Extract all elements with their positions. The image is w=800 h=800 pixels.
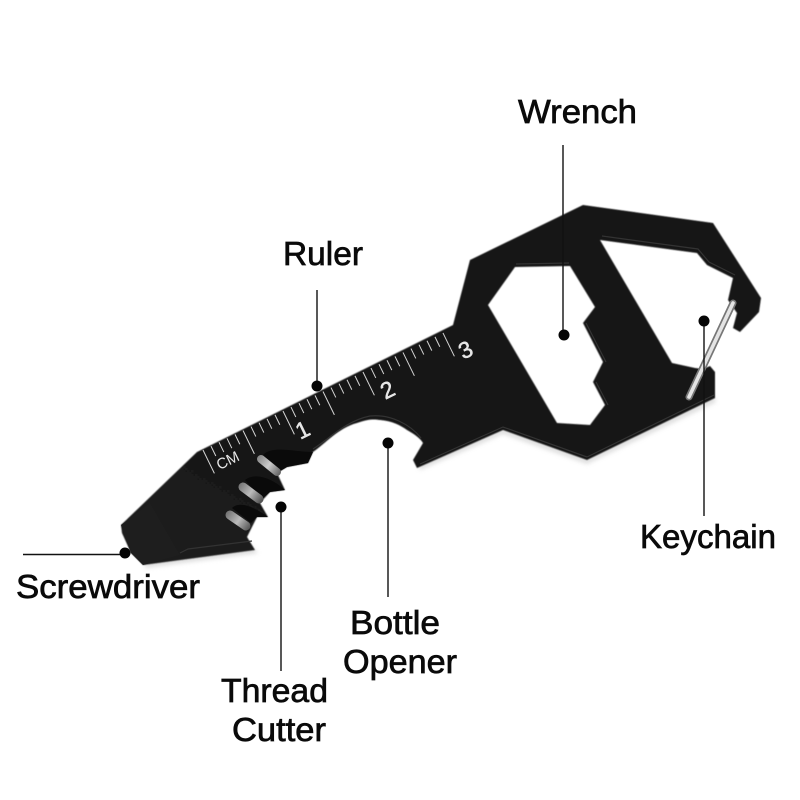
ruler number 1: 1	[291, 415, 314, 444]
keychain leader line	[703, 321, 705, 516]
thread cutter leader line	[280, 507, 282, 671]
ruler leader line	[316, 290, 318, 386]
ruler number 3: 3	[454, 335, 477, 364]
wrench label: Wrench	[518, 93, 637, 130]
soft drop shadow	[145, 396, 716, 568]
wrench dot	[558, 330, 570, 340]
callout: bottle opener	[343, 438, 457, 680]
ruler label: Ruler	[283, 235, 363, 272]
callout: thread cutter	[221, 502, 328, 748]
bottle opener dot	[382, 438, 394, 448]
thread label line: Thread	[221, 672, 328, 709]
metal tool body	[121, 205, 761, 565]
ruler scale ticks	[203, 333, 454, 473]
callout: screwdriver	[16, 548, 200, 605]
opener label line: Opener	[343, 643, 457, 680]
thread cutter dot	[276, 502, 286, 512]
keychain label: Keychain	[640, 518, 776, 555]
wrench leader line	[562, 145, 564, 335]
callout: wrench	[518, 93, 637, 340]
bottle label line: Bottle	[350, 604, 440, 641]
multi-tool illustration	[121, 205, 761, 568]
screwdriver dot	[120, 548, 130, 558]
callout: ruler	[283, 235, 363, 392]
keychain wire clip	[689, 303, 733, 397]
ruler label CM: CM	[214, 448, 242, 474]
screwdriver leader line	[23, 554, 125, 556]
keychain dot	[698, 316, 710, 326]
callout: keychain	[640, 316, 776, 555]
thread cutter teeth	[230, 450, 313, 526]
screwdriver blade facet	[121, 503, 180, 565]
cutter label line: Cutter	[232, 711, 326, 748]
ruler number 2: 2	[376, 375, 399, 404]
inner wall bevels	[180, 236, 735, 553]
ruler dot	[312, 380, 322, 392]
screwdriver label: Screwdriver	[16, 568, 200, 605]
bottle opener leader line	[387, 443, 389, 597]
